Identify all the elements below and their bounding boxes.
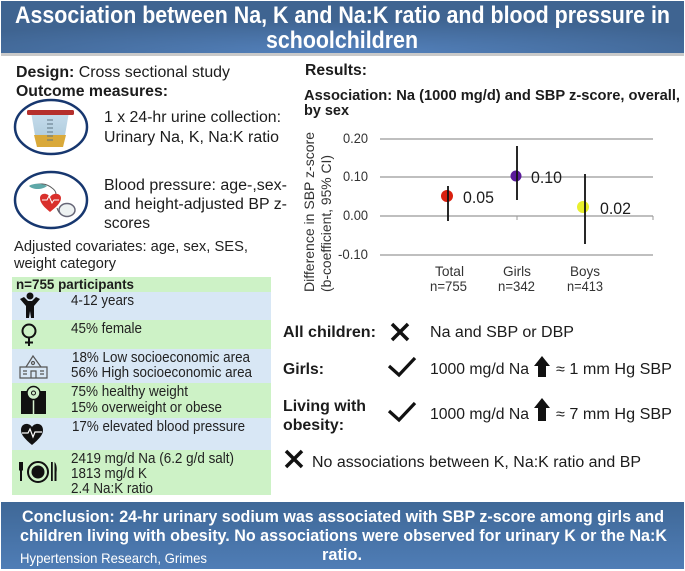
result row: girls bbox=[283, 356, 672, 378]
data point: girls: 0.10 bbox=[531, 168, 562, 187]
icon: heart with pulse bbox=[21, 424, 43, 445]
blood pressure text: scores bbox=[104, 215, 150, 232]
weight text: 75% healthy weight bbox=[71, 384, 188, 400]
title bbox=[15, 2, 670, 54]
adjusted covariates text bbox=[13, 239, 248, 272]
elevated blood pressure text: 17% elevated blood pressure bbox=[72, 419, 245, 435]
data point: total: 0.05 bbox=[463, 188, 494, 207]
intake text: 2419 mg/d Na (6.2 g/d salt) bbox=[71, 451, 234, 467]
x axis labels: Girls bbox=[503, 263, 531, 279]
socioeconomic text: 18% Low socioeconomic area bbox=[72, 350, 251, 366]
result row: girls: 1000 mg/d Na bbox=[430, 361, 529, 378]
chart heading: Association: Na (1000 mg/d) and SBP z-score, overall, bbox=[304, 88, 680, 104]
icon: up arrow bbox=[534, 356, 550, 377]
result row: living with obesity: 1000 mg/d Na bbox=[430, 406, 529, 423]
y axis tick labels: 0.20 bbox=[343, 130, 368, 146]
icon: blood pressure monitor bbox=[15, 172, 87, 228]
adjusted covariates text: Adjusted covariates: age, sex, SES, bbox=[14, 239, 248, 255]
icon: school building bbox=[20, 356, 47, 378]
result row: living with obesity: Living with bbox=[283, 398, 366, 415]
icon: check mark bbox=[389, 403, 415, 420]
age text: 4-12 years bbox=[71, 293, 134, 309]
y axis tick labels: 0.10 bbox=[343, 168, 368, 184]
x axis labels bbox=[430, 263, 603, 294]
result row: all children: All children: bbox=[283, 324, 376, 341]
x axis labels: Total bbox=[435, 263, 464, 279]
header banner bbox=[1, 1, 684, 56]
chart heading bbox=[304, 88, 680, 119]
conclusion text: ratio. bbox=[322, 545, 362, 564]
intake text bbox=[71, 451, 234, 497]
outcome measures heading: Outcome measures: bbox=[16, 83, 168, 100]
data point: total bbox=[441, 186, 494, 221]
x axis labels: Boys bbox=[570, 263, 600, 279]
chart heading: by sex bbox=[304, 103, 349, 119]
title: schoolchildren bbox=[266, 27, 418, 54]
result row: all children: Na and SBP or DBP bbox=[430, 324, 574, 341]
icon: up arrow bbox=[534, 398, 550, 421]
intake text: 2.4 Na:K ratio bbox=[71, 481, 153, 497]
x axis labels: n=413 bbox=[567, 278, 603, 294]
socioeconomic text bbox=[71, 350, 253, 381]
participants heading: n=755 participants bbox=[16, 276, 134, 292]
icon: urine collection cup bbox=[15, 100, 87, 154]
weight text: 15% overweight or obese bbox=[71, 400, 222, 416]
data point: girls bbox=[510, 146, 562, 200]
y axis title bbox=[301, 132, 334, 292]
socioeconomic text: 56% High socioeconomic area bbox=[71, 365, 253, 381]
female text: 45% female bbox=[71, 321, 142, 337]
icon: female symbol bbox=[22, 324, 36, 346]
icon: cross bbox=[286, 451, 302, 467]
data point: boys bbox=[577, 174, 631, 244]
conclusion text: children living with obesity. No associations were observed for urinary K or the Na:K bbox=[20, 526, 668, 545]
x axis labels: n=342 bbox=[498, 278, 535, 294]
weight text bbox=[71, 384, 222, 416]
icon: check mark bbox=[389, 358, 415, 375]
result row: living with obesity bbox=[283, 398, 672, 434]
chart: difference in SBP z-score bbox=[301, 130, 653, 294]
result row: no associations: No associations between K, Na:K ratio and BP bbox=[312, 454, 641, 471]
result row: girls: Girls: bbox=[283, 361, 324, 378]
y axis title: Difference in SBP z-score bbox=[301, 132, 317, 292]
design text: Design: Cross sectional study bbox=[16, 64, 230, 81]
icon: child bbox=[20, 292, 40, 318]
x axis labels: n=755 bbox=[430, 278, 467, 294]
results heading: Results: bbox=[305, 62, 367, 79]
y axis tick labels: -0.10 bbox=[338, 246, 368, 262]
y axis title: (b-coefficient, 95% CI) bbox=[318, 155, 334, 292]
urine collection text: 1 x 24-hr urine collection: bbox=[104, 109, 281, 126]
blood pressure text: Blood pressure: age-,sex- bbox=[104, 177, 287, 194]
urine collection text bbox=[104, 109, 281, 146]
y axis tick labels bbox=[338, 130, 368, 262]
adjusted covariates text: weight category bbox=[13, 256, 117, 272]
blood pressure text bbox=[104, 177, 287, 232]
result row: girls: ≈ 1 mm Hg SBP bbox=[556, 361, 672, 378]
blood pressure text: and height-adjusted BP z- bbox=[104, 196, 287, 213]
urine collection text: Urinary Na, K, Na:K ratio bbox=[104, 129, 279, 146]
result row: living with obesity: ≈ 7 mm Hg SBP bbox=[556, 406, 672, 423]
result row: living with obesity: obesity: bbox=[283, 417, 344, 434]
data point: boys: 0.02 bbox=[600, 199, 631, 218]
citation: Hypertension Research, Grimes bbox=[20, 550, 207, 566]
conclusion text: Conclusion: 24-hr urinary sodium was associated with SBP z-score among girls and bbox=[22, 507, 664, 526]
panel: participant characteristics bbox=[12, 276, 271, 497]
icon: weighing scale bbox=[21, 386, 46, 414]
icon: cross bbox=[392, 324, 408, 340]
conclusion banner bbox=[1, 502, 684, 569]
intake text: 1813 mg/d K bbox=[71, 466, 147, 482]
result row: all children bbox=[283, 324, 574, 341]
icon: plate and cutlery bbox=[19, 462, 57, 482]
conclusion text bbox=[20, 507, 668, 564]
y axis tick labels: 0.00 bbox=[343, 207, 368, 223]
